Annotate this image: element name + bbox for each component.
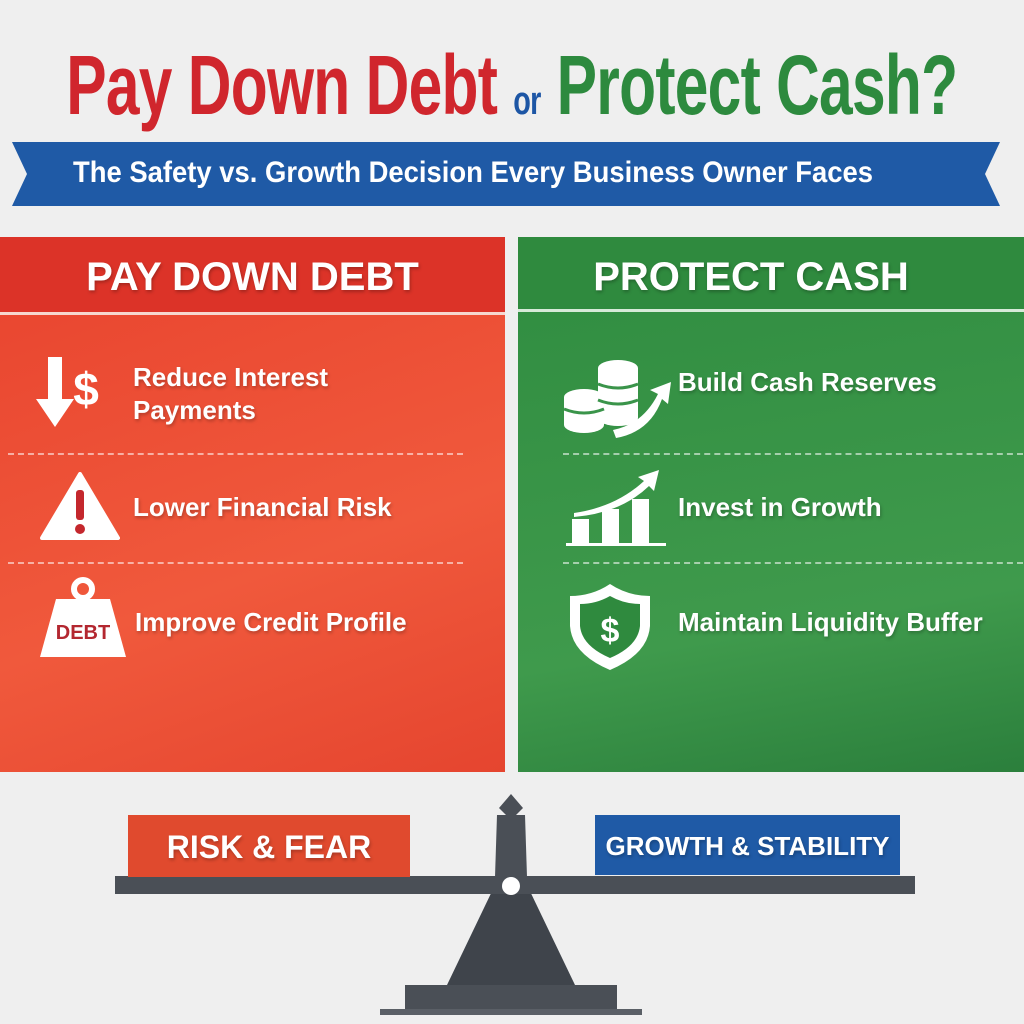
heading: protect cash: PROTECT CASH xyxy=(593,255,909,299)
subtitle banner: The Safety vs. Growth Decision Every Business Owner Faces xyxy=(73,156,873,189)
panel: protect cash xyxy=(518,237,1024,772)
text: maintain liquidity: Maintain Liquidity Buffer xyxy=(678,607,983,637)
subtitle banner xyxy=(12,142,1000,206)
text: build cash: Build Cash Reserves xyxy=(678,367,937,397)
label: risk & fear: RISK & FEAR xyxy=(167,829,371,865)
scale xyxy=(115,794,915,1015)
text: reduce interest: Payments xyxy=(133,395,256,425)
heading: protect cash xyxy=(518,237,1024,312)
icon: coins xyxy=(564,360,671,438)
text: reduce interest xyxy=(133,362,330,428)
icon: debt weight: DEBT xyxy=(56,622,110,644)
text: improve credit: Improve Credit Profile xyxy=(135,607,407,637)
panel: pay down debt xyxy=(0,237,505,772)
icon: shield dollar: $ xyxy=(601,612,620,650)
heading: pay down debt xyxy=(0,237,505,315)
title: Pay Down Debt or Protect Cash? xyxy=(66,38,958,132)
icon: down arrow dollar: $ xyxy=(73,363,99,415)
label: growth & stability: GROWTH & STABILITY xyxy=(605,831,890,861)
text: reduce interest: Reduce Interest xyxy=(133,362,328,392)
heading: pay down debt: PAY DOWN DEBT xyxy=(86,255,419,299)
label: risk & fear xyxy=(128,815,410,877)
icon: growth chart xyxy=(566,470,666,546)
label: growth & stability xyxy=(595,815,900,875)
text: invest: Invest in Growth xyxy=(678,492,882,522)
icon: debt weight xyxy=(40,577,126,657)
icon: shield dollar xyxy=(570,584,650,670)
text: lower risk: Lower Financial Risk xyxy=(133,492,392,522)
icon: warning xyxy=(40,472,120,540)
icon: down arrow dollar xyxy=(36,357,99,427)
